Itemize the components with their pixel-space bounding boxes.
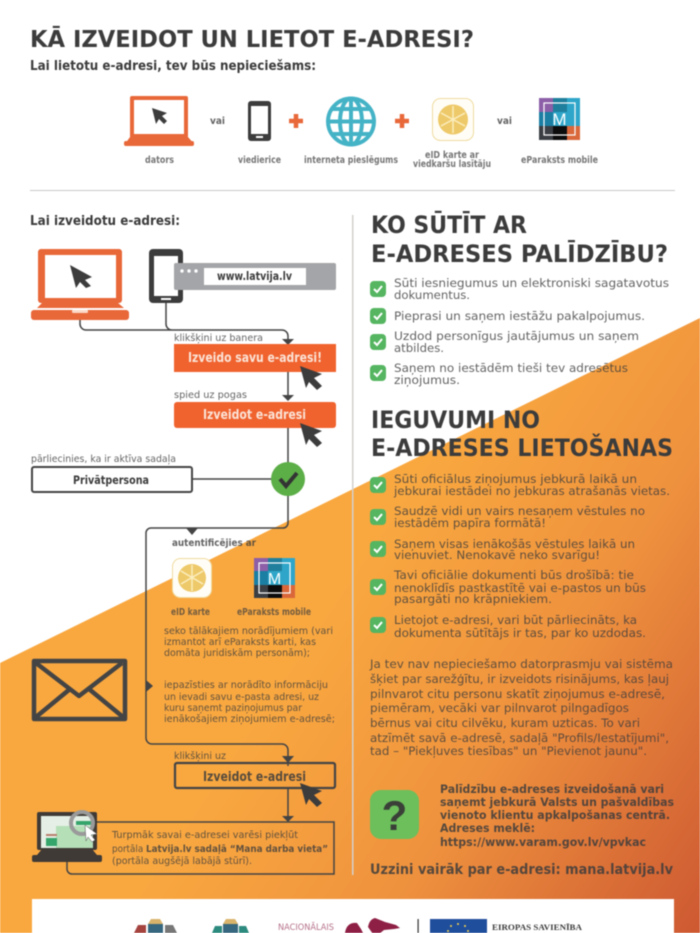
flow connector lines	[67, 303, 334, 874]
heading: E-ADRESES LIETOŠANAS	[371, 432, 673, 462]
label: viedierice: viedierice	[238, 155, 281, 166]
box: create e-address	[175, 763, 335, 788]
icon: eID card	[172, 558, 212, 598]
list item: dokumenta sūtītājs ir tas, par ko uzdodas.	[394, 626, 646, 640]
icon: laptop	[124, 96, 194, 146]
text: help centres: saņemt jebkurā Valsts un pašvaldības	[440, 795, 674, 809]
list item	[370, 472, 670, 498]
text: authorisation paragraph: Ja tev nav nepieciešamo datorprasmju vai sistēma	[369, 657, 673, 671]
create button: Izveidot e-adresi	[203, 408, 306, 423]
list item	[370, 537, 635, 562]
heading: Lai izveidotu e-adresi:	[30, 213, 180, 229]
icon: eParaksts mobile	[254, 558, 295, 598]
banner button	[174, 344, 336, 372]
text: authorisation paragraph: piemēram, vecāki var pilnvarot pilngadīgos	[370, 701, 629, 715]
text: authorisation paragraph: atzīmēt savā e-adresē, sadaļā "Profils/Iestatījumi",	[370, 731, 669, 745]
text: help centres: Adreses meklē:	[440, 821, 535, 835]
text: vai: vai	[497, 116, 512, 127]
label: press button: spied uz pogas	[174, 390, 247, 401]
label: interneta pieslēgums: interneta pieslēgums	[304, 155, 398, 166]
icon: globe	[328, 98, 375, 145]
icon: smartphone	[248, 101, 271, 141]
list item: dokumentus.	[394, 288, 470, 302]
icon: laptop with magnifier	[32, 812, 102, 862]
arrow	[282, 816, 294, 822]
list item: Saņem visas ienākošās vēstules laikā un	[394, 537, 635, 551]
list item	[370, 276, 669, 302]
cursor	[300, 366, 322, 390]
icon: help question mark	[370, 790, 419, 839]
text: authorisation paragraph: pilnvarot citu personu skatīt ziņojumus e-adresē,	[370, 687, 665, 701]
logo: national library text: NACIONĀLAIS	[278, 922, 334, 933]
label: click banner: klikšķini uz banera	[174, 332, 263, 344]
label: check section: pārliecinies, ka ir aktīva sadaļa	[31, 454, 176, 465]
label: eID karte ar viedkaršu lasītāju: viedkaršu lasītāju	[413, 159, 491, 170]
footer: logos	[32, 899, 674, 933]
arrow	[282, 339, 294, 345]
text: authorisation paragraph: šķiet par sarežģītu, ir izveidots risinājums, kas ļauj	[370, 672, 669, 686]
text: further access: Turpmāk savai e-adresei varēsi piekļūt	[111, 830, 298, 841]
arrow	[282, 756, 294, 763]
text: vai: vai	[210, 116, 225, 127]
cursor	[300, 783, 322, 807]
list item	[370, 504, 645, 530]
arrow	[186, 528, 198, 535]
text: further access	[111, 830, 328, 867]
icon: plus	[289, 114, 303, 128]
text: enter email	[164, 680, 335, 725]
box: private person: Privātpersona	[73, 473, 149, 487]
text: help centres: Palīdzību e-adreses izveidošanā vari	[440, 782, 664, 796]
text: help centres: vienoto klientu apkalpošanas centrā.	[440, 808, 670, 822]
icon: help question mark: ?	[382, 792, 407, 839]
box: private person	[32, 467, 192, 492]
list item: Lietojot e-adresi, vari būt pārliecināts, ka	[394, 613, 637, 627]
banner button: Izveido savu e-adresi!	[188, 351, 322, 366]
create button	[174, 402, 336, 428]
heading	[371, 209, 668, 268]
text: help centres	[440, 782, 674, 849]
list item: nenoklīdīs pastkastītē vai e-pastos un būs	[394, 581, 646, 595]
icon: envelope	[34, 661, 125, 719]
list item: vienuviet. Nenokavē neko svarīgu!	[394, 548, 600, 562]
icon: eParaksts mobile: M	[552, 110, 567, 129]
text: enter email: ienākošajiem ziņojumiem e-adresē;	[164, 713, 335, 725]
label: authenticate: autentificējies ar	[172, 538, 256, 549]
text: follow instructions: seko tālākajiem norādījumiem (vari	[164, 626, 333, 637]
requirements row	[124, 96, 598, 170]
text: authorisation paragraph: tad – "Piekļuves tiesības" un "Pievienot jaunu".	[370, 744, 647, 758]
label: eID karte ar viedkaršu lasītāju: eID karte ar	[425, 150, 479, 161]
text: further access: (portāla augšējā labājā stūrī).	[112, 855, 252, 867]
logo: maroon map	[345, 918, 400, 933]
logo: EU text: EIROPAS SAVIENĪBA	[492, 922, 583, 932]
logo: coat of arms 1	[134, 919, 177, 933]
icon: eID card	[432, 98, 474, 140]
text: authorisation paragraph	[369, 657, 673, 758]
icon: large smartphone	[149, 249, 183, 303]
address bar: www.latvija.lv	[217, 269, 292, 283]
list item	[370, 568, 646, 606]
list item: ziņojumus.	[394, 373, 460, 387]
list item	[370, 361, 628, 387]
list item: Tavi oficiālie dokumenti būs drošībā: tie	[393, 568, 634, 582]
icon: green check circle	[271, 462, 305, 496]
heading: E-ADRESES PALĪDZĪBU?	[371, 239, 668, 268]
box: create e-address: Izveidot e-adresi	[203, 770, 306, 785]
list item: iestādēm papīra formātā!	[394, 516, 546, 530]
text: follow instructions: domāta juridiskām personām);	[164, 648, 310, 659]
arrow	[282, 395, 294, 401]
arrow	[146, 680, 153, 692]
heading: KO SŪTĪT AR	[371, 209, 527, 239]
logo: EU flag	[430, 919, 487, 933]
heading: IEGUVUMI NO	[371, 406, 540, 434]
background: diagonal orange gradient	[0, 318, 700, 933]
panel: benefits	[370, 406, 673, 640]
text: enter email: kuru saņemt paziņojumus par	[164, 703, 303, 714]
label: eID karte ar viedkaršu lasītāju	[413, 150, 491, 170]
subtitle: Lai lietotu e-adresi, tev būs nepieciešams:	[30, 58, 316, 74]
list item: jebkurai iestādei no jebkuras atrašanās vietas.	[393, 484, 670, 498]
text: help centres: https://www.varam.gov.lv/vpvkac	[440, 835, 646, 849]
label: eParaksts mobile: eParaksts mobile	[521, 155, 598, 166]
icon: plus	[395, 114, 409, 128]
list item	[370, 613, 646, 640]
icon: eParaksts mobile: M	[268, 571, 281, 588]
list item: pasargāti no krāpniekiem.	[394, 592, 552, 606]
list item: Uzdod personīgus jautājumus un saņem	[394, 329, 639, 343]
text: further access: portāla Latvija.lv sadaļā “Mana darba vieta”	[112, 844, 328, 855]
heading	[371, 406, 673, 462]
text: follow instructions: izmantot arī eParaksts karti, kas	[164, 637, 316, 648]
list item: Sūti oficiālus ziņojumus jebkurā laikā un	[394, 472, 637, 486]
title: KĀ IZVEIDOT UN LIETOT E-ADRESI?	[30, 25, 474, 53]
label: dators: dators	[145, 155, 174, 166]
list item: Saņem no iestādēm tieši tev adresētus	[394, 361, 628, 375]
panel: what to send	[370, 209, 669, 387]
logo: coat of arms 2	[212, 919, 249, 933]
panel: how to create	[30, 213, 336, 874]
list item: Sūti iesniegumus un elektroniski sagatavotus	[394, 276, 669, 290]
label: click on: klikšķini uz	[174, 750, 226, 762]
text: follow instructions	[164, 626, 333, 659]
text: enter email: iepazīsties ar norādīto informāciju	[164, 680, 328, 691]
text: authorisation paragraph: bērnus vai citu cilvēku, kuram uzticas. To vari	[370, 716, 640, 730]
icon: large laptop	[31, 249, 129, 320]
list item	[370, 329, 639, 355]
text: enter email: un ievadi savu e-pasta adresi, uz	[164, 692, 319, 703]
list item: atbildes.	[394, 341, 444, 355]
label: eParaksts mobile: eParaksts mobile	[237, 607, 311, 618]
label: eID karte: eID karte	[171, 607, 210, 618]
cursor	[300, 423, 322, 447]
address bar	[174, 263, 336, 290]
list item: Saudzē vidi un vairs nesaņem vēstules no	[394, 504, 645, 518]
list item: Pieprasi un saņem iestāžu pakalpojumus.	[394, 309, 645, 323]
icon: eParaksts mobile	[539, 98, 580, 140]
